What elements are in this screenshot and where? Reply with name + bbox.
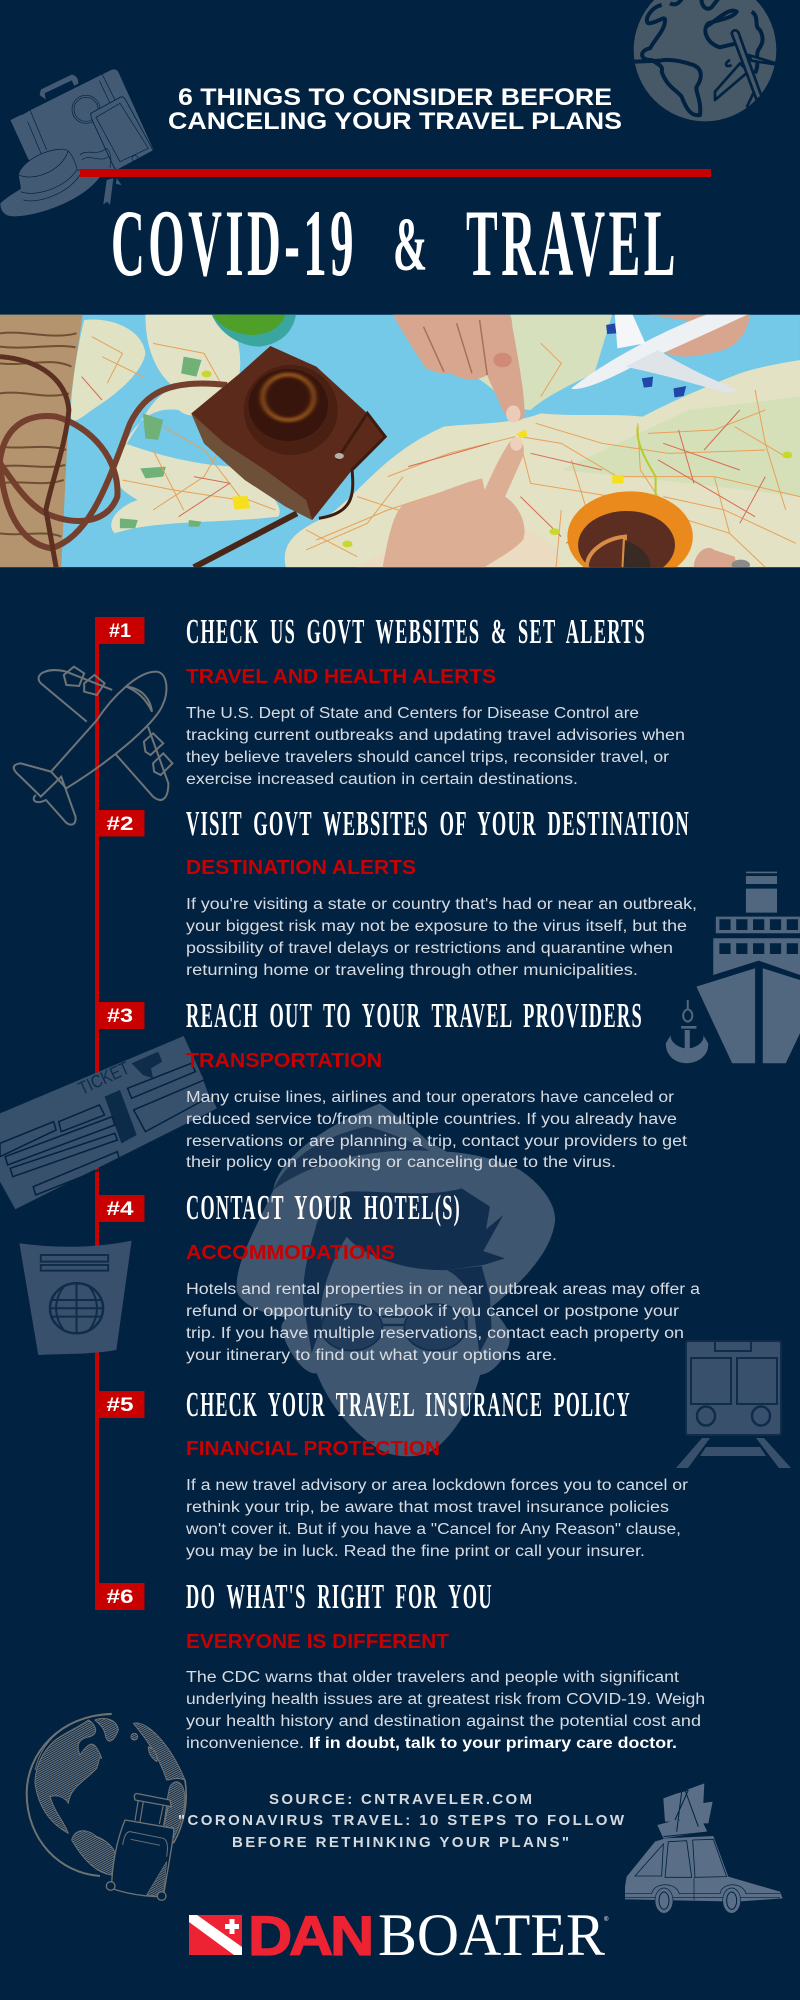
step 5 (95, 1385, 688, 1560)
body 6 (186, 1669, 705, 1752)
badge 6 (95, 1583, 144, 1610)
body 3: Many cruise lines, airlines and tour operators have canceled or (186, 1089, 674, 1106)
body 4: your itinerary to find out what your options are. (186, 1347, 557, 1364)
subtitle: CANCELING YOUR TRAVEL PLANS (168, 108, 622, 135)
logo wordmark: BOATER (378, 1902, 605, 1968)
subtitle (168, 84, 622, 135)
icon: plane ticket (0, 1036, 217, 1209)
body 1: exercise increased caution in certain destinations. (186, 771, 578, 788)
timeline line (95, 620, 99, 1585)
red divider (80, 169, 711, 177)
body 4 (186, 1281, 700, 1364)
heading 4: CONTACT YOUR HOTEL(S) (186, 1188, 461, 1227)
badge 4 (95, 1195, 144, 1222)
body 4: Hotels and rental properties in or near outbreak areas may offer a (186, 1281, 700, 1298)
icon: face with sunglasses (237, 1103, 555, 1456)
badge 6: #6 (106, 1587, 134, 1608)
badge 2: #2 (106, 814, 134, 835)
body 5: rethink your trip, be aware that most travel insurance policies (186, 1499, 669, 1516)
step 3 (95, 996, 688, 1171)
icon: car with luggage (625, 1783, 783, 1913)
icon: globe with plane (633, 0, 785, 121)
icon: hatched globe and suitcase (27, 1713, 186, 1900)
body 4: refund or opportunity to rebook if you cancel or postpone your (186, 1303, 679, 1320)
source citation: SOURCE: CNTRAVELER.COM (269, 1791, 532, 1808)
source citation (178, 1791, 625, 1851)
icon: train (676, 1341, 791, 1468)
subheading 6: EVERYONE IS DIFFERENT (186, 1631, 449, 1653)
logo flag (189, 1915, 242, 1955)
body 5 (185, 1477, 688, 1560)
source citation: BEFORE RETHINKING YOUR PLANS" (232, 1834, 569, 1851)
body 6: The CDC warns that older travelers and people with significant (186, 1669, 680, 1686)
icon: cruise ship (666, 872, 800, 1063)
photo: hands pointing at a map with camera, plane and tea (0, 315, 800, 582)
title: & (393, 203, 431, 287)
subheading 5: FINANCIAL PROTECTION (186, 1438, 440, 1460)
icon: suitcase, phone and hat (0, 69, 154, 217)
body 6: inconvenience. (186, 1735, 304, 1752)
icon: ticket label: TICKET (75, 1058, 133, 1099)
logo wordmark (248, 1902, 609, 1968)
step 6 (95, 1577, 705, 1752)
body 5: If a new travel advisory or area lockdown forces you to cancel or (186, 1477, 688, 1494)
logo wordmark: ® (604, 1916, 609, 1923)
subheading 4: ACCOMMODATIONS (186, 1242, 395, 1264)
body 4: trip. If you have multiple reservations, contact each property on (186, 1325, 684, 1342)
subheading 3: TRANSPORTATION (186, 1050, 382, 1072)
body 2: If you're visiting a state or country that's had or near an outbreak, (186, 896, 697, 913)
body 1 (186, 705, 685, 788)
body 1: tracking current outbreaks and updating travel advisories when (186, 727, 685, 744)
body 2 (186, 896, 697, 979)
badge 1: #1 (109, 621, 131, 642)
body 6: If in doubt, talk to your primary care doctor. (309, 1735, 677, 1752)
step 4 (95, 1188, 700, 1364)
badge 2 (95, 810, 144, 836)
body 2: your biggest risk may not be exposure to the virus itself, but the (186, 918, 687, 935)
body 6: your health history and destination against the potential cost and (186, 1713, 701, 1730)
body 5: you may be in luck. Read the fine print or call your insurer. (186, 1543, 645, 1560)
title: COVID-19 (111, 190, 357, 296)
body 3: reduced service to/from multiple countries. If you already have (186, 1111, 677, 1128)
subheading 2: DESTINATION ALERTS (186, 857, 416, 879)
badge 1 (95, 617, 144, 644)
body 3: reservations or are planning a trip, contact your providers to get (186, 1133, 688, 1150)
badge 5 (95, 1391, 144, 1418)
icon: passport (19, 1241, 132, 1355)
badge 3 (95, 1002, 144, 1029)
badge 4: #4 (106, 1199, 134, 1220)
body 2: returning home or traveling through other municipalities. (186, 962, 638, 979)
body 1: they believe travelers should cancel trips, reconsider travel, or (186, 749, 669, 766)
logo: DAN Boater (189, 1902, 609, 1968)
source citation: "CORONAVIRUS TRAVEL: 10 STEPS TO FOLLOW (178, 1812, 625, 1829)
body 1: The U.S. Dept of State and Centers for Disease Control are (186, 705, 639, 722)
step 2 (95, 804, 697, 979)
body 2: possibility of travel delays or restrictions and quarantine when (186, 940, 673, 957)
step 1 (95, 612, 685, 788)
body 6: underlying health issues are at greatest risk from COVID-19. Weigh (186, 1691, 705, 1708)
badge 3: #3 (107, 1006, 133, 1027)
body 3 (186, 1089, 688, 1171)
subtitle: 6 THINGS TO CONSIDER BEFORE (178, 84, 612, 111)
heading 6: DO WHAT'S RIGHT FOR YOU (186, 1577, 493, 1616)
body 5: won't cover it. But if you have a "Cancel for Any Reason" clause, (185, 1521, 681, 1538)
badge 5: #5 (106, 1395, 134, 1416)
logo wordmark: DAN (248, 1904, 371, 1967)
subheading 1: TRAVEL AND HEALTH ALERTS (186, 666, 496, 688)
body 3: their policy on rebooking or canceling due to the virus. (186, 1154, 616, 1171)
icon: line-art airplane (14, 667, 172, 825)
